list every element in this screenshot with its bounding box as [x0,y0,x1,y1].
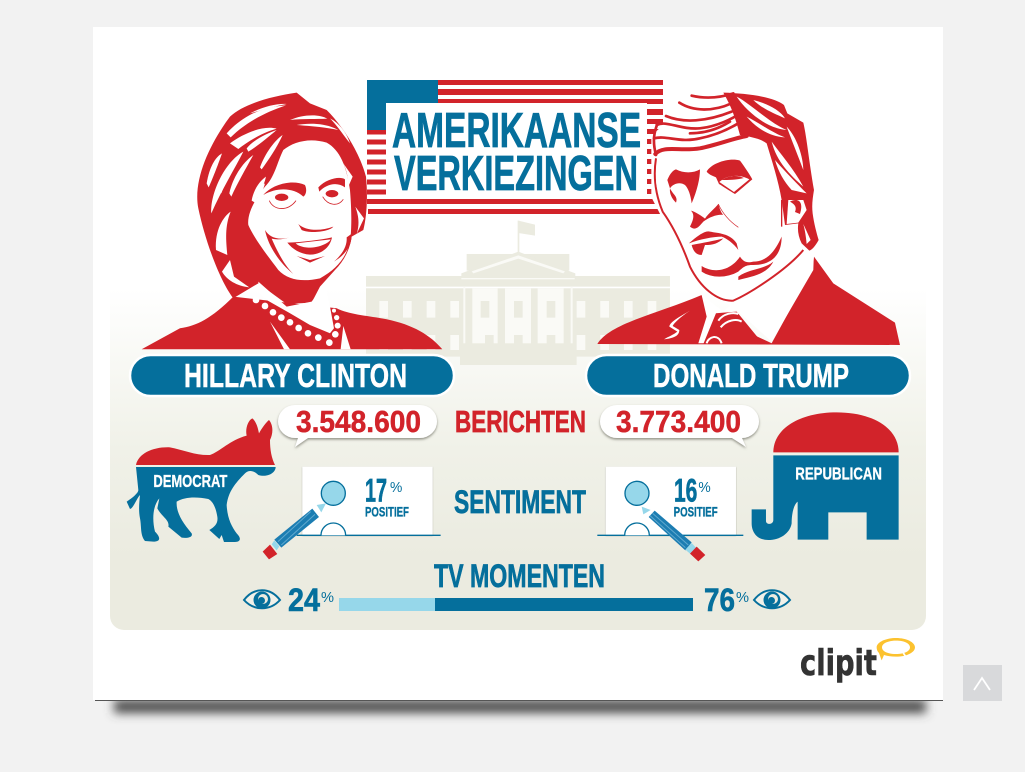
face [248,140,351,280]
beige background panel [110,270,926,630]
speech bubble: Clinton count: 3.548.600 [296,404,421,439]
tv moments bar [339,598,693,611]
icon: eye right [754,590,790,608]
portrait: Hillary Clinton [142,93,442,349]
sentiment card: Clinton: % [390,479,402,496]
jacket [142,297,442,349]
icon: eye left [244,590,280,608]
title [392,104,641,201]
hair highlights [207,104,364,287]
neck [258,282,334,333]
card drop shadow [114,700,926,713]
icon: democrat donkey [127,418,276,542]
sentiment card: Clinton [263,467,441,559]
icon: democrat donkey: DEMOCRAT [153,471,228,491]
sentiment card: Clinton: 17 [365,473,387,509]
value: 24%: 24 [288,582,320,618]
collar [698,252,814,343]
portrait: Donald Trump [597,90,900,345]
sentiment card: Trump: 16 [674,473,697,509]
heading: tv momenten: TV MOMENTEN [434,558,605,594]
hair [197,93,367,304]
name pill: Donald Trump: DONALD TRUMP [653,357,849,394]
hair highlights [656,97,811,244]
title: VERKIEZINGEN [394,147,638,201]
flag title block [367,80,663,214]
value: 76%: % [736,589,749,606]
scroll to top button [963,665,1002,701]
white halo [653,90,820,307]
pencil [642,507,705,561]
sentiment card: Trump: % [698,479,711,496]
sentiment card: Clinton: POSITIEF [365,505,409,520]
white card [93,27,943,700]
tie [703,312,765,344]
pearl necklace [253,297,341,346]
name pill: Hillary Clinton: HILLARY CLINTON [184,357,407,394]
title: AMERIKAANSE [392,104,641,158]
card bottom edge [95,700,943,701]
flag canton [367,80,438,130]
value: 76%: 76 [704,582,735,618]
jacket [597,257,900,345]
heading: berichten: BERICHTEN [455,404,586,439]
hair right mass [723,93,819,251]
flag stripes [367,80,663,214]
speech bubble: Trump count: 3.773.400 [616,404,741,439]
name pill: Donald Trump [586,355,910,396]
ear and face details [667,160,801,280]
hair left strands [654,93,747,155]
icon: republican elephant: REPUBLICAN [795,463,882,483]
white title box [386,103,647,196]
white house [366,221,670,365]
face features [263,178,351,274]
face outline [655,158,803,301]
logo: clipit: clipit [800,643,877,684]
value: 24%: % [321,589,334,606]
icon: republican elephant [752,412,899,540]
sentiment card: Trump: POSITIEF [674,505,718,520]
pencil [263,503,326,559]
heading: sentiment: SENTIMENT [454,484,586,520]
sentiment card: Trump [597,467,743,561]
